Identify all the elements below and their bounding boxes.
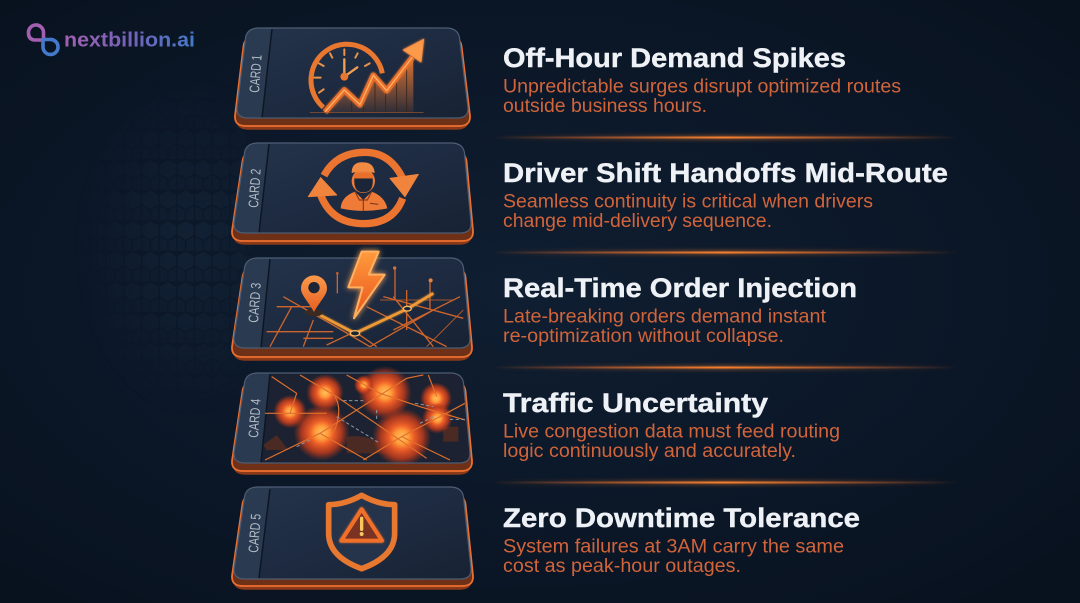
description: Live congestion data must feed routing	[503, 422, 840, 442]
card 1: off-hour demand spikes	[235, 28, 470, 129]
icon: logo loops	[28, 25, 58, 54]
icon: shield with warning triangle	[329, 495, 395, 569]
divider	[490, 136, 958, 139]
description: Seamless continuity is critical when drivers	[503, 192, 873, 212]
description: System failures at 3AM carry the same	[503, 536, 844, 558]
icon: map pin, lightning and road grid	[267, 252, 463, 347]
divider	[490, 251, 958, 254]
logo wordmark: nextbillion.ai	[64, 30, 195, 52]
card 4: traffic uncertainty	[232, 366, 472, 474]
description: cost as peak-hour outages.	[503, 556, 741, 577]
divider	[490, 481, 958, 484]
card label: CARD 5	[245, 513, 264, 553]
description: Late-breaking orders demand instant	[503, 306, 827, 328]
description: change mid-delivery sequence.	[503, 211, 772, 232]
card 3: real-time order injection	[232, 252, 472, 360]
icon: driver with cycle arrows	[308, 152, 418, 224]
card 5: zero downtime tolerance	[232, 487, 473, 589]
card 2: driver shift handoffs	[232, 143, 473, 244]
card label: CARD 1	[246, 54, 265, 93]
description: logic continuously and accurately.	[503, 441, 796, 462]
icon: clock with rising arrow	[310, 39, 424, 113]
heading: Off-Hour Demand Spikes	[503, 43, 846, 73]
text block: off-hour demand spikes	[503, 43, 901, 117]
text block: traffic uncertainty	[503, 388, 840, 462]
divider	[490, 366, 958, 369]
card label: CARD 4	[245, 398, 264, 438]
description: Unpredictable surges disrupt optimized routes	[503, 76, 901, 98]
description: outside business hours.	[503, 96, 707, 117]
heading: Real-Time Order Injection	[503, 273, 857, 303]
heading: Zero Downtime Tolerance	[503, 503, 860, 533]
description: re-optimization without collapse.	[503, 326, 784, 347]
icon: traffic heat map	[263, 366, 465, 467]
text block: zero downtime tolerance	[503, 503, 860, 577]
heading: Driver Shift Handoffs Mid-Route	[503, 158, 948, 188]
logo: nextbillion.ai	[28, 25, 195, 54]
card label: CARD 3	[245, 282, 264, 323]
heading: Traffic Uncertainty	[503, 388, 768, 418]
card label: CARD 2	[245, 168, 264, 208]
text block: real-time order injection	[503, 273, 857, 347]
text block: driver shift handoffs	[503, 158, 948, 232]
hexagon texture	[152, 193, 220, 294]
